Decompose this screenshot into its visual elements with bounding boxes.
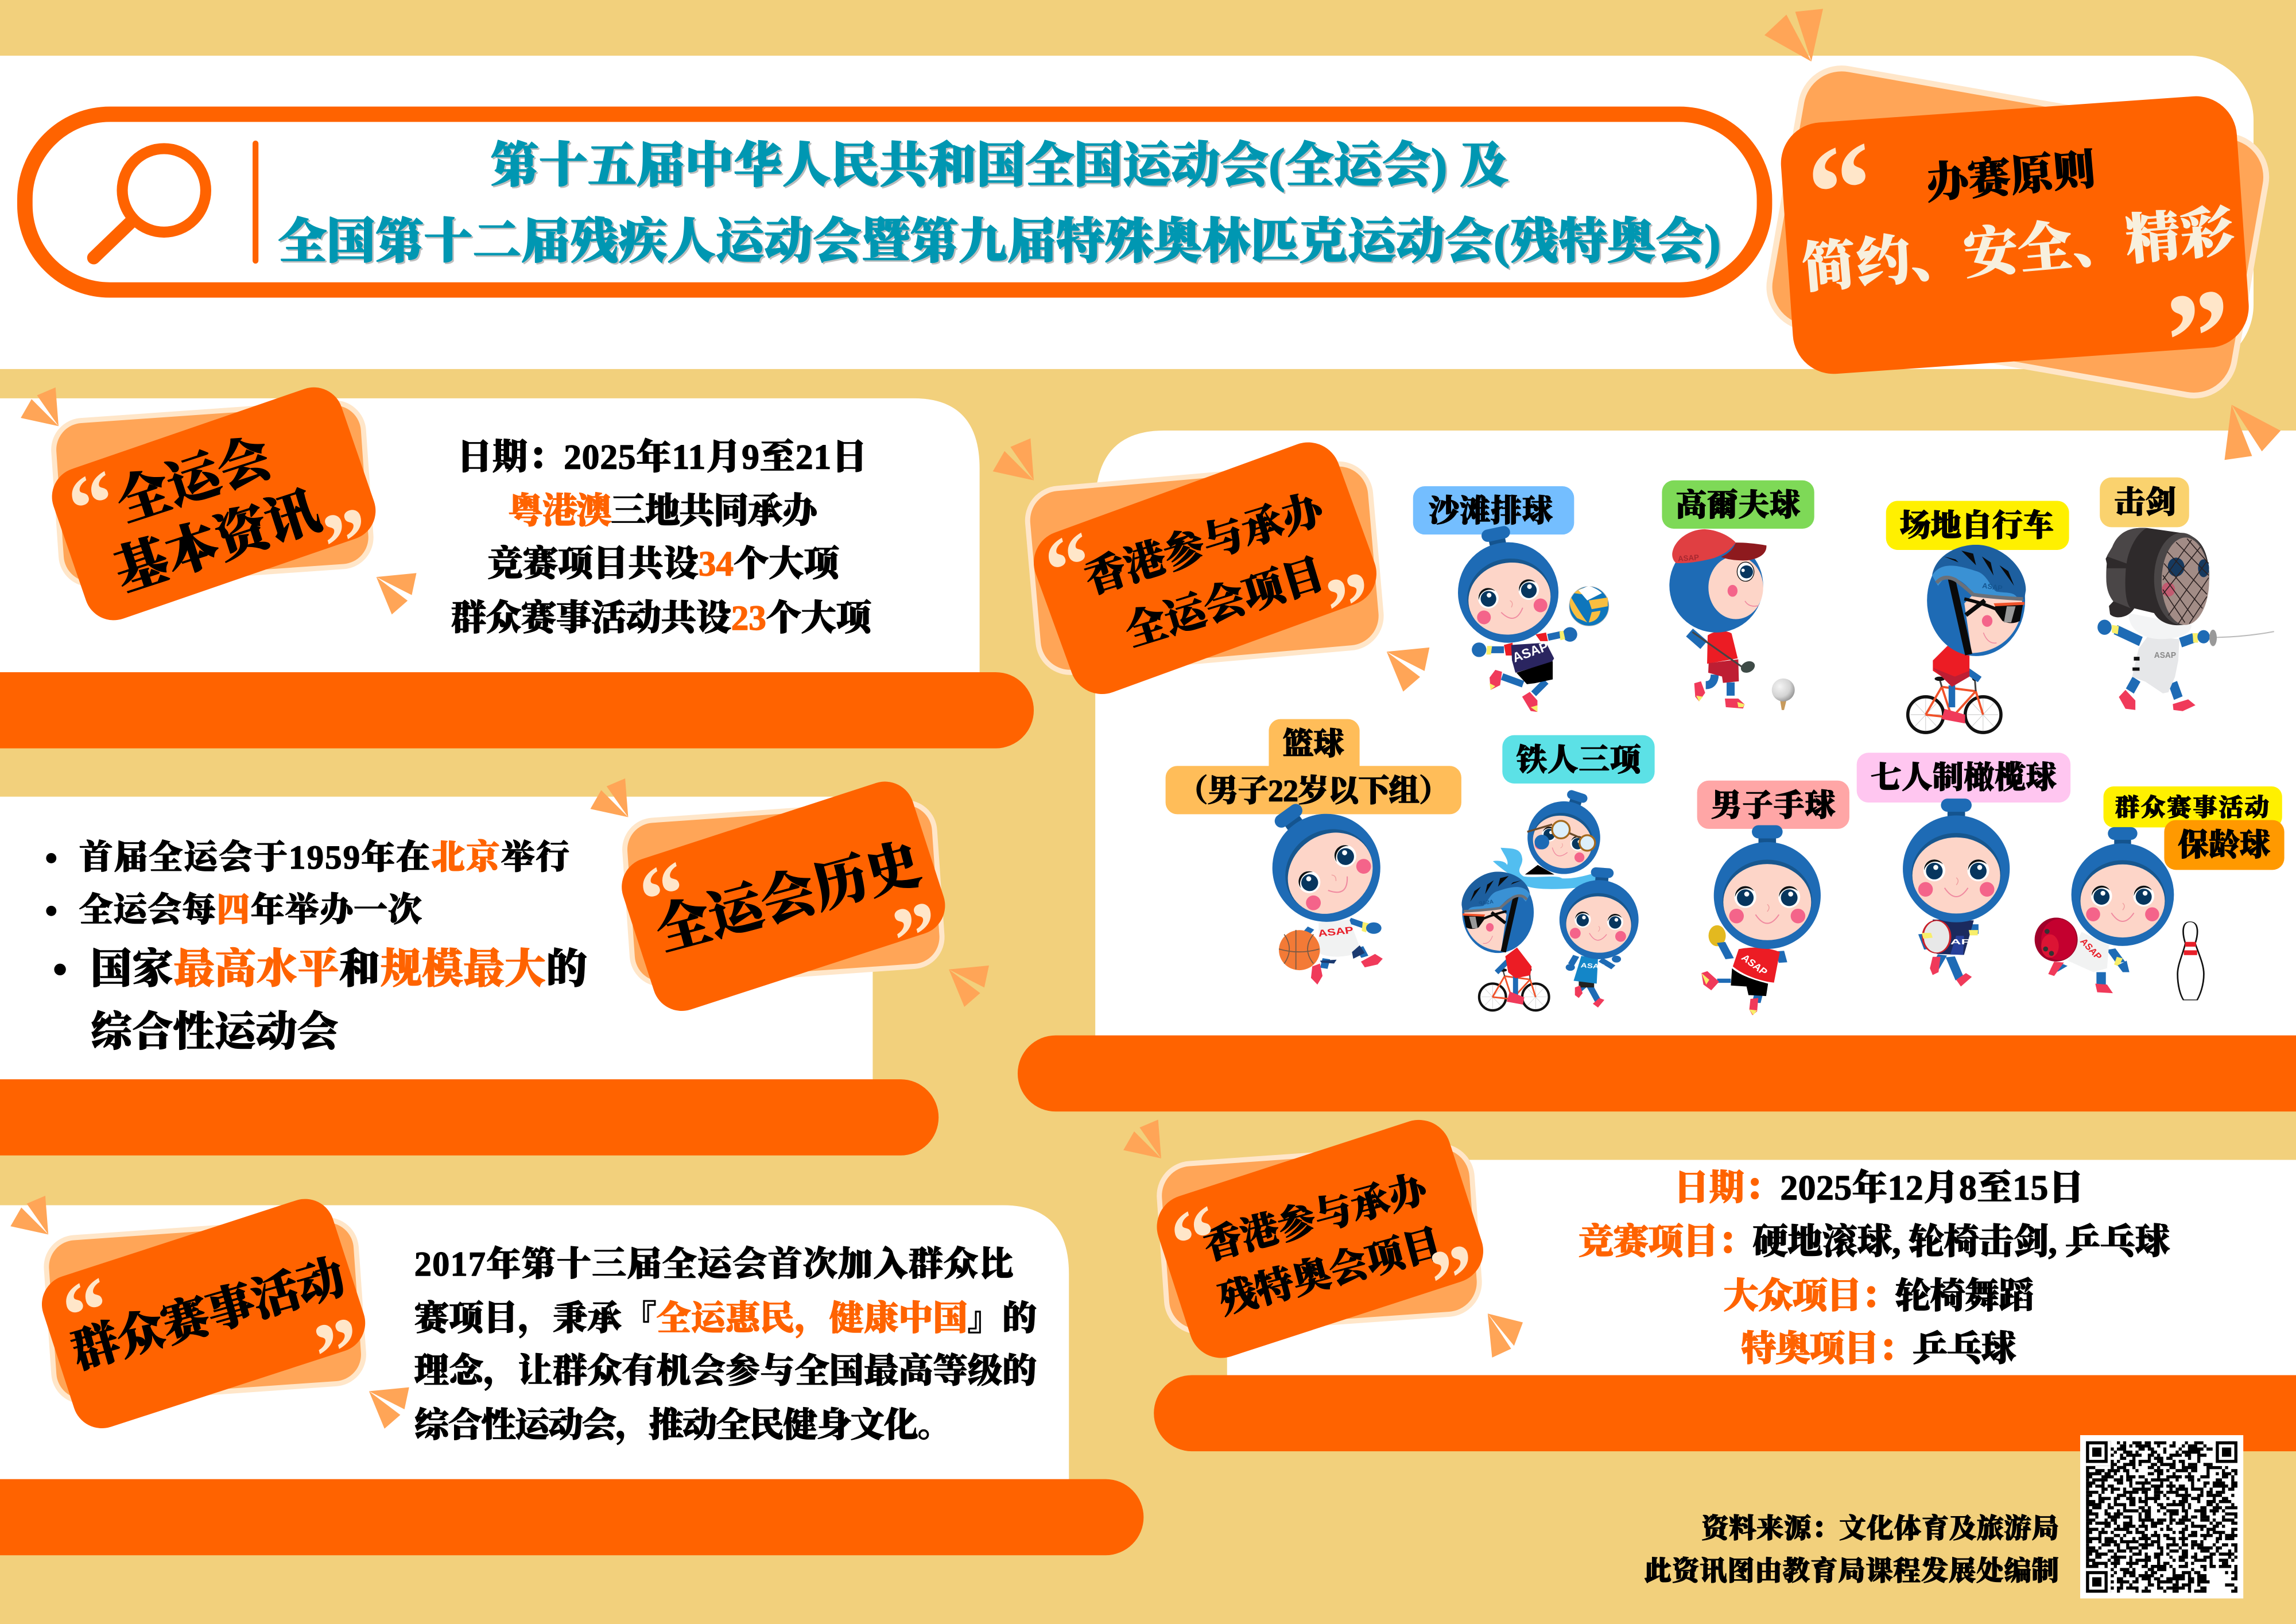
card: Hong Kong national games heading: 香港参与承办 [1080, 486, 1332, 602]
tag: beach volleyball [1413, 486, 1574, 534]
title divider [253, 141, 258, 263]
paralympic details text: 日期：2025年12月8至15日 [1674, 1168, 2084, 1207]
tag: rugby sevens [1857, 753, 2070, 803]
mascot: rugby sevens: AP [1950, 939, 1971, 946]
card: mass events heading: “ [52, 1258, 122, 1367]
tag: rugby sevens: 七人制橄榄球 [1871, 760, 2057, 794]
card: Hong Kong para games heading: 残特奥会项目 [1214, 1223, 1446, 1322]
card: basic information heading: ” [313, 487, 383, 596]
mascot: rugby sevens [1903, 799, 2010, 986]
card: organising principles: ” [2158, 259, 2243, 414]
tag: mass event [2104, 786, 2282, 827]
tag: fencing [2100, 478, 2189, 527]
icon: basketball [1279, 930, 1320, 970]
paralympic details text: 特奥项目：乒乓球 [1741, 1330, 2016, 1369]
icon: bowling ball [2035, 918, 2078, 962]
card: Hong Kong national games heading: “ [1035, 513, 1105, 621]
tag: fencing: 击剑 [2115, 485, 2176, 520]
mascot: golf [1669, 529, 1795, 710]
mass events paragraph [414, 1245, 1037, 1445]
history bullet list: 综合性运动会 [91, 1009, 339, 1055]
tag: men's handball: 男子手球 [1711, 788, 1836, 823]
history bullet list: 国家最高水平和规模最大的 [91, 946, 587, 992]
card: basic information heading: 基本资讯 [108, 481, 327, 602]
card: organising principles: 简约、安全、精彩 [1799, 202, 2236, 299]
title: 全国第十二届残疾人运动会暨第九届特殊奥林匹克运动会(残特奥会) [278, 215, 1720, 269]
icon: golf ball on tee [1772, 679, 1795, 710]
tag: basketball [1166, 719, 1461, 814]
card: basic information heading: “ [59, 451, 128, 560]
card: organising principles: “ [1799, 113, 1884, 268]
sport tags [1166, 478, 2285, 870]
mascot: fencing: ASAP [2154, 651, 2176, 660]
mascot: fencing [2097, 528, 2274, 711]
card: Hong Kong national games heading [1025, 433, 1386, 703]
card: mass events heading: ” [304, 1297, 374, 1406]
card: history heading: 全运会历史 [650, 834, 927, 962]
mascot: beach volleyball: ASAP [1510, 638, 1550, 665]
info text: 粤港澳三地共同承办 [508, 492, 821, 531]
mascot: basketball [1241, 778, 1402, 985]
card: mass events heading [34, 1191, 374, 1436]
panel: sports [1018, 431, 2296, 1111]
card: history heading [614, 774, 953, 1018]
mass events paragraph: 理念，让群众有机会参与全国最高等级的 [414, 1351, 1037, 1391]
card: organising principles [1763, 62, 2272, 414]
source credits [1645, 1514, 2059, 1587]
mascot: golf: ASAP [1678, 553, 1700, 563]
mass events paragraph: 综合性运动会，推动全民健身文化。 [414, 1406, 952, 1445]
title: 第十五届中华人民共和国全国运动会(全运会) 及 [491, 139, 1508, 192]
mass events paragraph: 2017年第十三届全运会首次加入群众比 [414, 1245, 1013, 1283]
tag: mass event: 群众赛事活动 [2115, 794, 2269, 821]
mascot: triathlon swim [1493, 781, 1613, 889]
title pill [25, 114, 1764, 290]
info text: 群众赛事活动共设23个大项 [451, 598, 874, 638]
tag: cycling: 场地自行车 [1900, 509, 2054, 543]
tag: triathlon [1502, 735, 1655, 784]
panel: history [0, 797, 938, 1156]
history bullet list: 首届全运会于1959年在北京举行 [79, 838, 569, 876]
mascot: triathlon running [1557, 865, 1642, 1007]
tag: triathlon: 铁人三项 [1517, 743, 1643, 777]
tag: golf [1662, 480, 1814, 529]
card: Hong Kong para games heading: “ [1161, 1186, 1231, 1295]
tag: men's handball [1697, 781, 1849, 829]
tag: basketball: 篮球 [1283, 727, 1344, 761]
QR code [2080, 1435, 2243, 1598]
card: mass events heading: 群众赛事活动 [66, 1251, 351, 1378]
panel: top header [0, 56, 2254, 369]
mascot: basketball: ASAP [1317, 925, 1354, 939]
tag: cycling [1886, 501, 2069, 550]
card: Hong Kong para games heading: ” [1420, 1224, 1490, 1333]
history bullet list: 全运会每四年举办一次 [79, 892, 422, 929]
card: Hong Kong para games heading [1149, 1111, 1492, 1366]
tag: golf: 高爾夫球 [1676, 488, 1800, 522]
tag: bowling [2164, 820, 2285, 870]
card: history heading: ” [883, 882, 952, 990]
panel: mass events [0, 1206, 1143, 1555]
source credits: 此资讯图由教育局课程发展处编制 [1645, 1556, 2059, 1587]
mascot: handball [1701, 825, 1821, 1015]
icon: magnifier [94, 149, 205, 258]
source credits: 资料来源：文化体育及旅游局 [1701, 1514, 2059, 1544]
icon: bowling pin [2178, 922, 2204, 1000]
mascot: track cycling [1908, 545, 2026, 732]
info text: 竞赛项目共设34个大项 [487, 544, 841, 584]
mascot: beach volleyball [1445, 517, 1609, 712]
mascot: triathlon running: ASAP [1580, 962, 1605, 970]
card: Hong Kong national games heading: ” [1316, 552, 1386, 661]
mascot: bowling: ASAP [2078, 937, 2104, 962]
paralympic details text: 竞赛项目：硬地滚球, 轮椅击剑, 乒乓球 [1578, 1222, 2170, 1262]
panel: basic information [0, 398, 1034, 749]
info text: 日期：2025年11月9至21日 [457, 437, 867, 476]
panel: paralympic info [1154, 1160, 2296, 1451]
tag: bowling: 保龄球 [2178, 828, 2270, 862]
card: basic information heading: 全运会 [110, 427, 279, 532]
paralympic details text: 大众项目：轮椅舞蹈 [1724, 1277, 2034, 1316]
tag: beach volleyball: 沙滩排球 [1429, 494, 1553, 528]
card: organising principles: 办赛原则 [1924, 146, 2097, 208]
paralympic details text [1578, 1168, 2170, 1369]
info text [451, 437, 874, 638]
mascot: handball: ASAP [1739, 952, 1770, 978]
mass events paragraph: 赛项目，秉承『全运惠民，健康中国』的 [414, 1299, 1037, 1338]
mascot: bowling [2035, 827, 2204, 1000]
tag: basketball: （男子22岁以下组） [1177, 773, 1450, 808]
title [278, 139, 1720, 269]
card: Hong Kong national games heading: 全运会项目 [1120, 552, 1329, 655]
card: basic information heading [44, 379, 383, 628]
icon: volleyball [1569, 586, 1609, 626]
card: history heading: “ [629, 842, 699, 951]
history bullet list [46, 838, 587, 1055]
card: Hong Kong para games heading: 香港参与承办 [1200, 1168, 1434, 1268]
mascot: triathlon cycling [1461, 872, 1549, 1010]
